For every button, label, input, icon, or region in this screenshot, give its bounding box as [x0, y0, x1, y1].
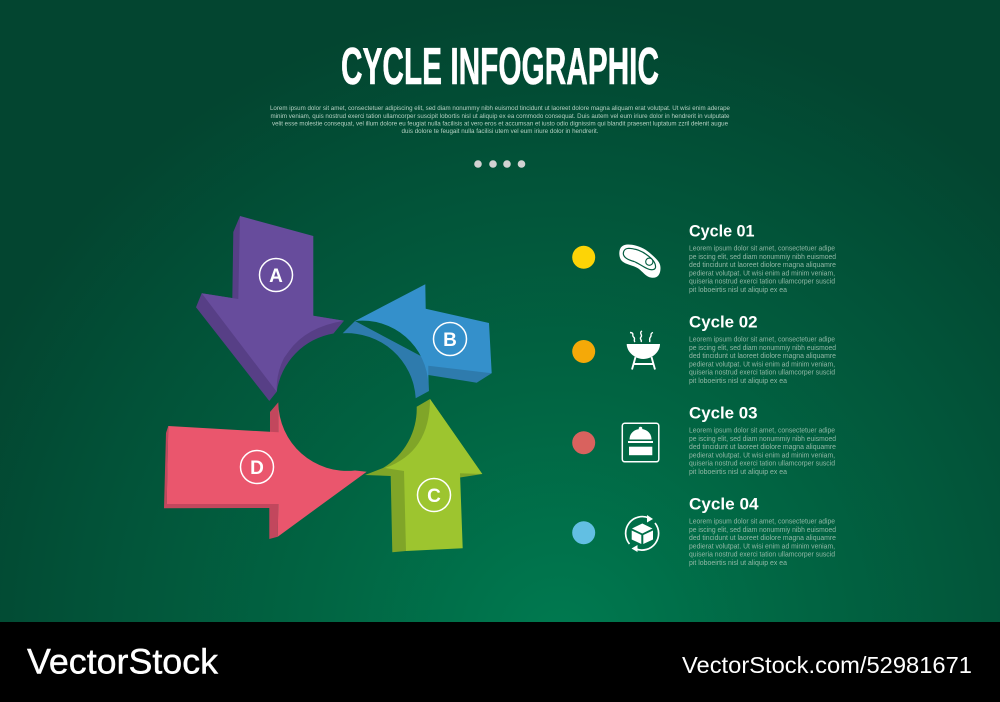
- description: Leorem ipsum dolor sit amet, consectetuer adipe: [689, 336, 835, 344]
- arrow C: green: C: [427, 486, 441, 507]
- marker: yellow: [572, 246, 595, 269]
- description: ded tincidunt ut laoreet diolore magna aliquamre: [689, 535, 836, 542]
- description: Leorem ipsum dolor sit amet, consectetuer adipe: [689, 246, 835, 252]
- marker: red: [572, 431, 595, 454]
- description: [689, 428, 836, 476]
- intro text: Lorem ipsum dolor sit amet, consectetuer adipiscing elit, sed diam nonummy nibh euismod tincidunt ut laoreet dolore magna aliquam erat volutpat. Ut wisi enim aderape: [270, 106, 731, 112]
- description: pedierat volutpat. Ut wisi enim ad minim veniam,: [689, 452, 835, 459]
- intro text: [270, 106, 731, 135]
- item: Cycle 02: [572, 312, 836, 385]
- description: ded tincidunt ut laoreet diolore magna aliquamre: [689, 444, 836, 451]
- arrow A: purple: A: [269, 266, 283, 287]
- description: pit loboeirtis nisl ut aliquip ex ea: [689, 287, 787, 294]
- pagination dots: [474, 160, 525, 168]
- description: pe iscing elit, sed diam nonummiy nibh euismoed: [689, 254, 836, 261]
- arrow D: pink: D: [250, 458, 264, 479]
- cycle diagram: [164, 216, 492, 552]
- heading: Cycle 01: [689, 222, 754, 240]
- description: pedierat volutpat. Ut wisi enim ad minim veniam,: [689, 361, 835, 368]
- marker: orange: [572, 340, 595, 363]
- heading: Cycle 03: [689, 404, 758, 422]
- description: [689, 246, 836, 294]
- icon: covered dish: [622, 423, 659, 462]
- watermark url: VectorStock.com/52981671: [682, 652, 972, 678]
- description: pit loboeirtis nisl ut aliquip ex ea: [689, 560, 787, 567]
- description: pit loboeirtis nisl ut aliquip ex ea: [689, 469, 787, 476]
- item: Cycle 04: [572, 494, 836, 567]
- watermark logo text: VectorStock: [27, 642, 219, 681]
- heading: Cycle 02: [689, 312, 758, 332]
- icon: steak: [619, 244, 660, 278]
- description: [689, 336, 836, 385]
- description: Leorem ipsum dolor sit amet, consectetuer adipe: [689, 518, 835, 526]
- description: pe iscing elit, sed diam nonummiy nibh euismoed: [689, 345, 836, 352]
- arrow C: green: [365, 399, 482, 552]
- description: quiseria nostrud exerci tation ullamcorper suscid: [689, 279, 835, 286]
- description: quiseria nostrud exerci tation ullamcorper suscid: [689, 552, 835, 559]
- heading: Cycle 04: [689, 494, 759, 514]
- description: quiseria nostrud exerci tation ullamcorper suscid: [689, 461, 835, 468]
- description: pe iscing elit, sed diam nonummiy nibh euismoed: [689, 436, 836, 443]
- description: ded tincidunt ut laoreet diolore magna aliquamre: [689, 262, 836, 269]
- arrow B: blue: B: [443, 330, 457, 351]
- description: pit loboeirtis nisl ut aliquip ex ea: [689, 378, 787, 385]
- marker: light blue: [572, 521, 595, 544]
- icon: box with cycle arrows: [626, 515, 659, 552]
- icon: grill: [627, 331, 660, 370]
- watermark bar: [0, 622, 1000, 702]
- intro text: duis dolore te feugait nulla facilisi utem vel eum iriure dolor in hendrerit.: [402, 129, 599, 135]
- description: quiseria nostrud exerci tation ullamcorper suscid: [689, 370, 835, 377]
- description: ded tincidunt ut laoreet diolore magna aliquamre: [689, 353, 836, 360]
- description: [689, 518, 836, 567]
- intro text: minim veniam, quis nostrud exerci tation ullamcorper suscipit lobortis nisl ut aliquip ex ea commodo consequat. Duis autem vel eum iriure dolor in hendrerit in vulputate: [270, 114, 730, 120]
- description: pe iscing elit, sed diam nonummiy nibh euismoed: [689, 527, 836, 534]
- item: Cycle 03: [572, 404, 836, 476]
- arrow D: pink: [164, 402, 367, 539]
- title: CYCLE INFOGRAPHIC: [341, 38, 659, 96]
- item: Cycle 01: [572, 222, 836, 294]
- intro text: velit esse molestie consequat, vel illum dolore eu feugiat nulla facilisis at vero eros et accumsan et iusto odio dignissim qui blandit praesent luptatum zzril delenit augue: [272, 121, 729, 127]
- description: Leorem ipsum dolor sit amet, consectetuer adipe: [689, 428, 835, 434]
- description: pedierat volutpat. Ut wisi enim ad minim veniam,: [689, 270, 835, 277]
- arrow B: blue: [343, 284, 492, 398]
- arrow A: purple: [196, 216, 344, 401]
- description: pedierat volutpat. Ut wisi enim ad minim veniam,: [689, 543, 835, 550]
